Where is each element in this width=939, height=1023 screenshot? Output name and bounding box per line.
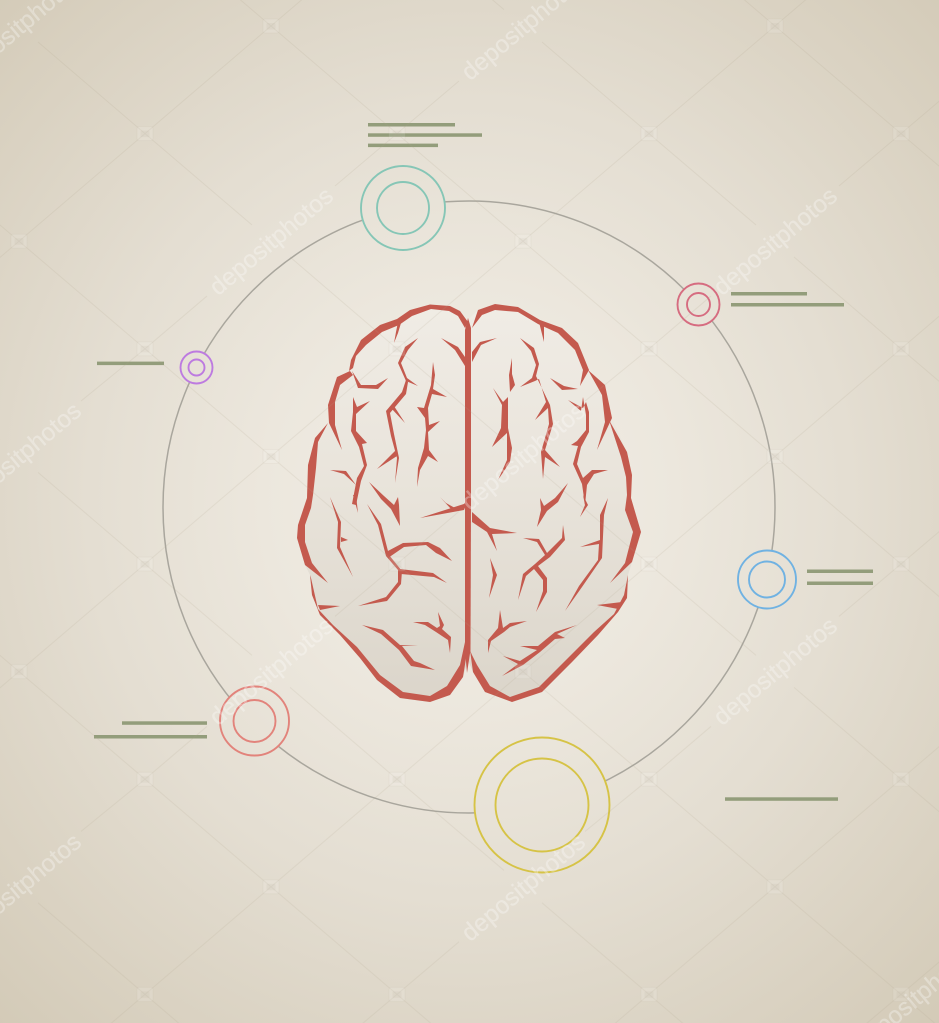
watermark text: depositphotos [709, 612, 843, 731]
left hemisphere outline [297, 304, 468, 702]
right hemisphere outline [470, 304, 641, 702]
node: teal ring [361, 166, 445, 250]
left hemisphere folds [318, 322, 467, 670]
watermark text: depositphotos [457, 397, 591, 516]
watermark text: depositphotos [457, 828, 591, 947]
node: coral ring [220, 686, 289, 756]
node: pink ring [678, 284, 720, 326]
text placeholder: yellow callout [725, 797, 838, 801]
brain illustration [297, 304, 641, 702]
text placeholder: top callout [368, 123, 482, 147]
orbit ring [163, 201, 775, 813]
midline fissure [465, 318, 471, 673]
watermark text: depositphotos [205, 182, 339, 301]
node: yellow ring [474, 738, 610, 872]
text placeholder: coral callout [94, 721, 207, 738]
brain fill [297, 304, 641, 702]
watermark text: depositphotos [709, 182, 843, 301]
text placeholder: purple callout [97, 362, 164, 365]
text placeholder: pink callout [731, 292, 844, 306]
node: purple ring [180, 352, 212, 384]
text placeholder: blue callout [807, 570, 873, 585]
node: blue ring [738, 550, 796, 608]
right hemisphere folds [464, 322, 622, 676]
watermark text: depositphotos [205, 612, 339, 731]
